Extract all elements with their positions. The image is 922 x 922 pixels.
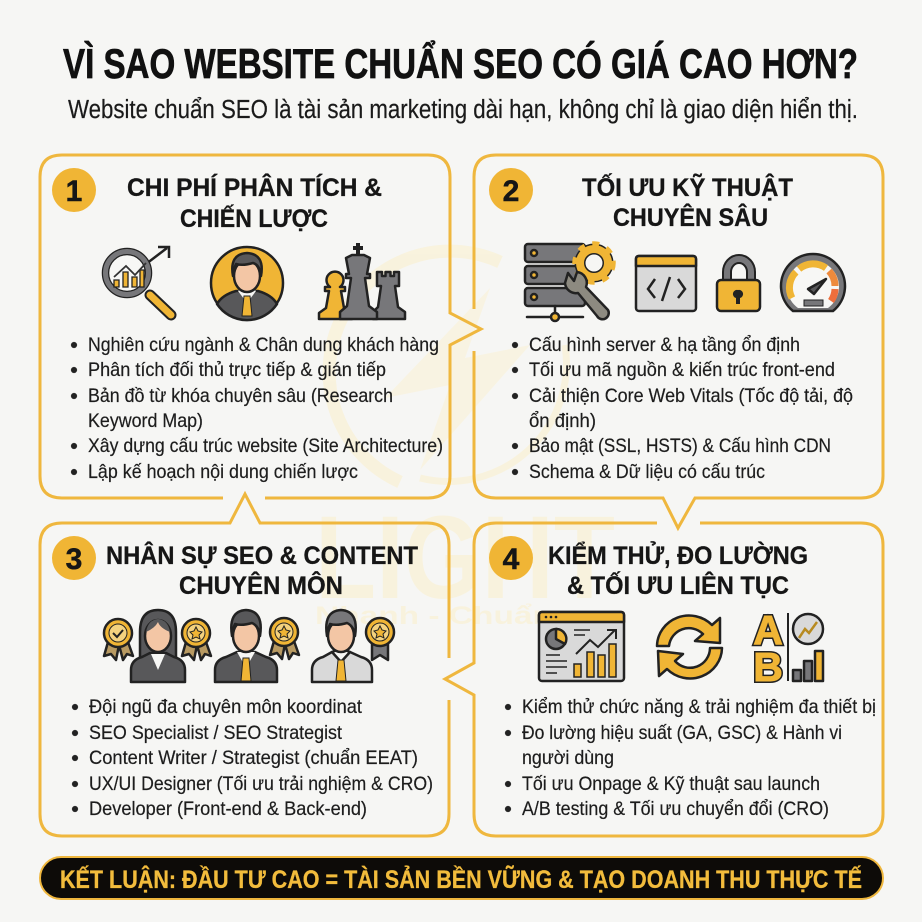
bullet list 3: SEO Specialist / SEO Strategist — [89, 722, 343, 744]
icon: A/B testing: A — [753, 607, 783, 653]
icon: server with gear and wrench — [525, 244, 614, 321]
bullet list 4: A/B testing & Tối ưu chuyển đổi (CRO) — [522, 798, 829, 820]
bullet list 1: Lập kế hoạch nội dung chiến lược — [88, 461, 358, 483]
woman figure — [131, 610, 185, 682]
number badge 4: 4 — [503, 543, 520, 576]
number badge 1: 1 — [66, 175, 82, 208]
heading 3: NHÂN SỰ SEO & CONTENT — [106, 540, 418, 570]
bullet list 2: Cải thiện Core Web Vitals (Tốc độ tải, độ — [529, 385, 853, 407]
badge with check — [104, 619, 133, 660]
bullet list 3: Đội ngũ đa chuyên môn koordinat — [89, 696, 363, 718]
heading 3 — [106, 540, 418, 600]
bullet list 1: Xây dựng cấu trúc website (Site Architecture) — [88, 435, 443, 457]
panel 2: deep technical optimization — [474, 155, 883, 528]
panel 1: analysis and strategy costs — [40, 155, 481, 498]
conclusion banner — [40, 857, 883, 899]
heading 2 — [582, 172, 793, 232]
panel 4: testing, measuring, optimizing — [445, 523, 883, 836]
bullet list 2: Schema & Dữ liệu có cấu trúc — [529, 461, 765, 483]
icon: team with award badges — [104, 610, 394, 682]
bullet list 3 — [72, 696, 433, 820]
bullet list 1: Nghiên cứu ngành & Chân dung khách hàng — [88, 334, 439, 356]
badge with grey ribbon — [366, 618, 394, 660]
watermark logo — [315, 251, 615, 630]
bullet list 1: Keyword Map) — [88, 410, 203, 432]
icon: A/B testing: B — [753, 644, 783, 690]
icon: chess pieces — [319, 243, 405, 319]
heading 3: CHUYÊN MÔN — [179, 570, 343, 600]
bullet list 2: Tối ưu mã nguồn & kiến trúc front-end — [529, 359, 835, 381]
heading 4: KIỂM THỬ, ĐO LƯỜNG — [548, 540, 808, 570]
number badge 1 — [52, 168, 96, 212]
heading 2: TỐI ƯU KỸ THUẬT — [582, 172, 793, 202]
bullet list 4: Đo lường hiệu suất (GA, GSC) & Hành vi — [522, 722, 842, 744]
bullet list 2: Cấu hình server & hạ tầng ổn định — [529, 334, 800, 356]
bullet list 3: UX/UI Designer (Tối ưu trải nghiệm & CRO) — [89, 773, 433, 795]
heading 1: CHI PHÍ PHÂN TÍCH & — [127, 172, 382, 202]
bullet list 4: người dùng — [522, 747, 614, 769]
heading 4: & TỐI ƯU LIÊN TỤC — [567, 570, 789, 600]
icon: magnifier with chart — [103, 247, 171, 315]
panel 3 outline with arrow — [40, 494, 449, 836]
man in shirt — [312, 610, 372, 682]
badge with star — [270, 618, 299, 659]
icon: A/B testing — [753, 607, 823, 690]
icon: refresh cycle — [657, 616, 722, 678]
man in suit — [215, 610, 277, 682]
number badge 2 — [489, 168, 533, 212]
icon: code window — [636, 256, 696, 311]
heading 1: CHIẾN LƯỢC — [180, 204, 328, 233]
watermark logo: LIGHT — [315, 492, 615, 624]
number badge 3: 3 — [66, 543, 82, 576]
bullet list 1 — [71, 334, 443, 483]
number badge 3 — [52, 536, 96, 580]
panel 1 outline with arrow — [40, 155, 481, 498]
bullet list 1: Bản đồ từ khóa chuyên sâu (Research — [88, 385, 393, 407]
icon: A/B testing: A — [753, 607, 783, 653]
icon: consultant portrait — [211, 247, 283, 320]
bullet list 4: Kiểm thử chức năng & trải nghiệm đa thiết bị — [522, 696, 876, 718]
icon: analytics dashboard — [539, 612, 624, 681]
watermark logo: Nhanh - Chuẩn — [315, 602, 553, 630]
heading 1 — [127, 172, 382, 233]
bullet list 4: Tối ưu Onpage & Kỹ thuật sau launch — [522, 773, 820, 795]
icon: speed gauge — [781, 254, 845, 311]
number badge 2: 2 — [503, 175, 519, 208]
bullet list 2 — [512, 334, 853, 483]
bullet list 2: ổn định) — [529, 410, 596, 432]
heading 2: CHUYÊN SÂU — [613, 202, 768, 232]
bullet list 2: Bảo mật (SSL, HSTS) & Cấu hình CDN — [529, 435, 831, 457]
bullet list 3: Content Writer / Strategist (chuẩn EEAT) — [89, 747, 418, 769]
bullet list 3: Developer (Front-end & Back-end) — [89, 798, 367, 820]
icon: A/B testing: B — [753, 644, 783, 690]
badge with star — [182, 619, 211, 660]
number badge 4 — [489, 536, 533, 580]
panel 4 outline with arrow — [445, 523, 883, 836]
icon: padlock — [717, 259, 760, 311]
heading 4 — [548, 540, 808, 600]
bullet list 4 — [505, 696, 876, 820]
bullet list 1: Phân tích đối thủ trực tiếp & gián tiếp — [88, 359, 386, 381]
panel 2 outline with arrow — [474, 155, 883, 528]
panel 3: SEO and content staff — [40, 494, 449, 836]
